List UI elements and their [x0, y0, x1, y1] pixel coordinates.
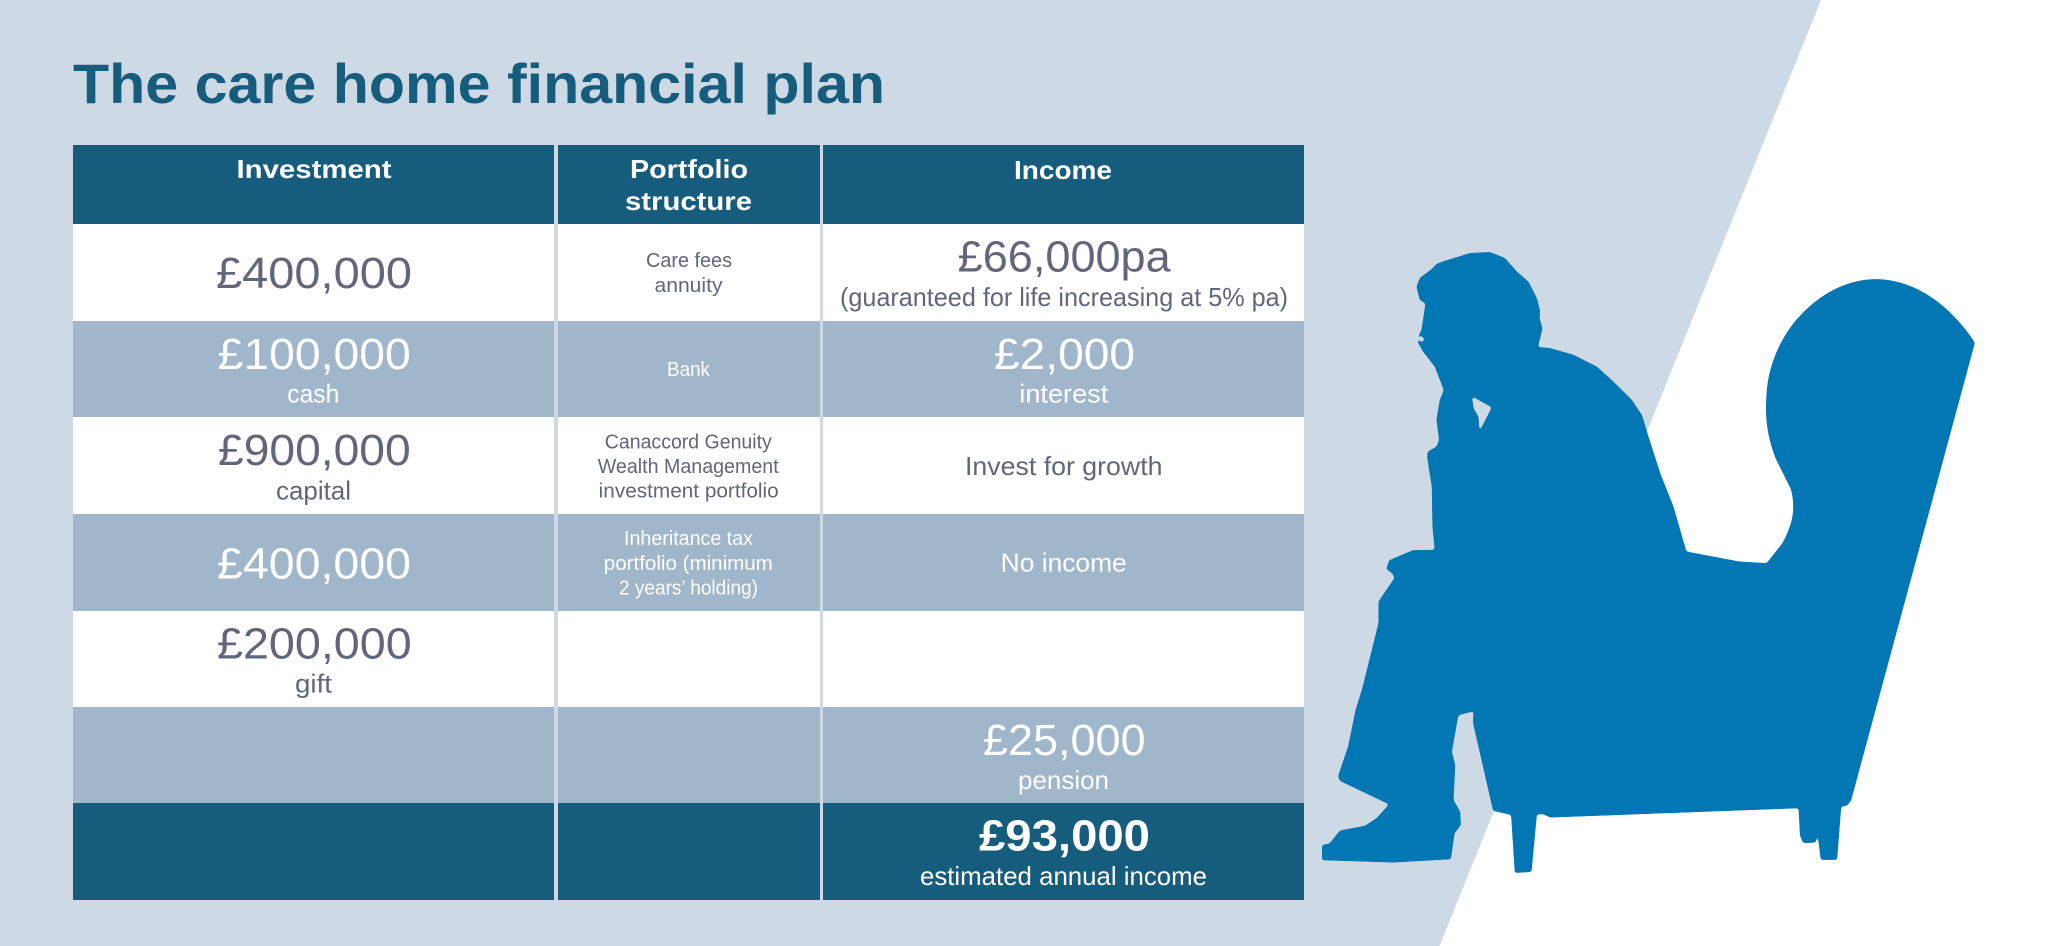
header row: [73, 145, 1304, 224]
row: gift: gift: [295, 668, 333, 698]
row: gift: £200,000: [217, 619, 412, 668]
row: capital investment portfolio: £900,000: [218, 426, 411, 475]
row: inheritance tax portfolio: portfolio (minimum: [604, 553, 773, 575]
row: inheritance tax portfolio: 2 years’ holding): [619, 577, 758, 599]
row: cash in bank: [73, 321, 1304, 417]
row: cash in bank: interest: [1019, 378, 1109, 408]
row: care fees annuity: (guaranteed for life increasing at 5% pa): [840, 282, 1288, 312]
row: cash in bank: Bank: [667, 359, 711, 381]
row: care fees annuity: £400,000: [216, 249, 412, 298]
header row: Portfolio: [630, 154, 748, 184]
row: inheritance tax portfolio: [73, 514, 1304, 611]
row: care fees annuity: [73, 224, 1304, 321]
row: capital investment portfolio: Wealth Management: [598, 456, 779, 478]
row: care fees annuity: annuity: [654, 275, 722, 297]
row: inheritance tax portfolio: Inheritance tax: [624, 528, 753, 550]
row: capital investment portfolio: capital: [276, 475, 351, 505]
row: pension: pension: [1018, 765, 1109, 795]
row: care fees annuity: Care fees: [646, 250, 732, 272]
row: cash in bank: cash: [287, 378, 339, 408]
header row: structure: [625, 186, 752, 216]
row: pension: £25,000: [983, 716, 1146, 765]
row: total income: estimated annual income: [920, 861, 1207, 891]
row: capital investment portfolio: Invest for growth: [965, 451, 1162, 481]
row: capital investment portfolio: investment portfolio: [599, 481, 779, 503]
row: cash in bank: £100,000: [218, 330, 411, 379]
row: cash in bank: £2,000: [994, 330, 1135, 379]
row: pension: [73, 707, 1304, 803]
row: total income: £93,000: [979, 812, 1150, 861]
row: capital investment portfolio: Canaccord Genuity: [605, 431, 772, 453]
row: total income: [73, 803, 1304, 900]
title: The care home financial plan: [73, 52, 885, 115]
silhouette: man seated in wing-back armchair: [1322, 252, 1975, 873]
header row: Income: [1014, 155, 1112, 185]
row: care fees annuity: £66,000pa: [958, 232, 1171, 282]
header row: Investment: [236, 154, 392, 184]
row: gift: [73, 611, 1304, 707]
table: [73, 145, 1304, 900]
row: capital investment portfolio: [73, 417, 1304, 514]
row: inheritance tax portfolio: No income: [1001, 548, 1127, 578]
row: inheritance tax portfolio: £400,000: [217, 539, 411, 588]
